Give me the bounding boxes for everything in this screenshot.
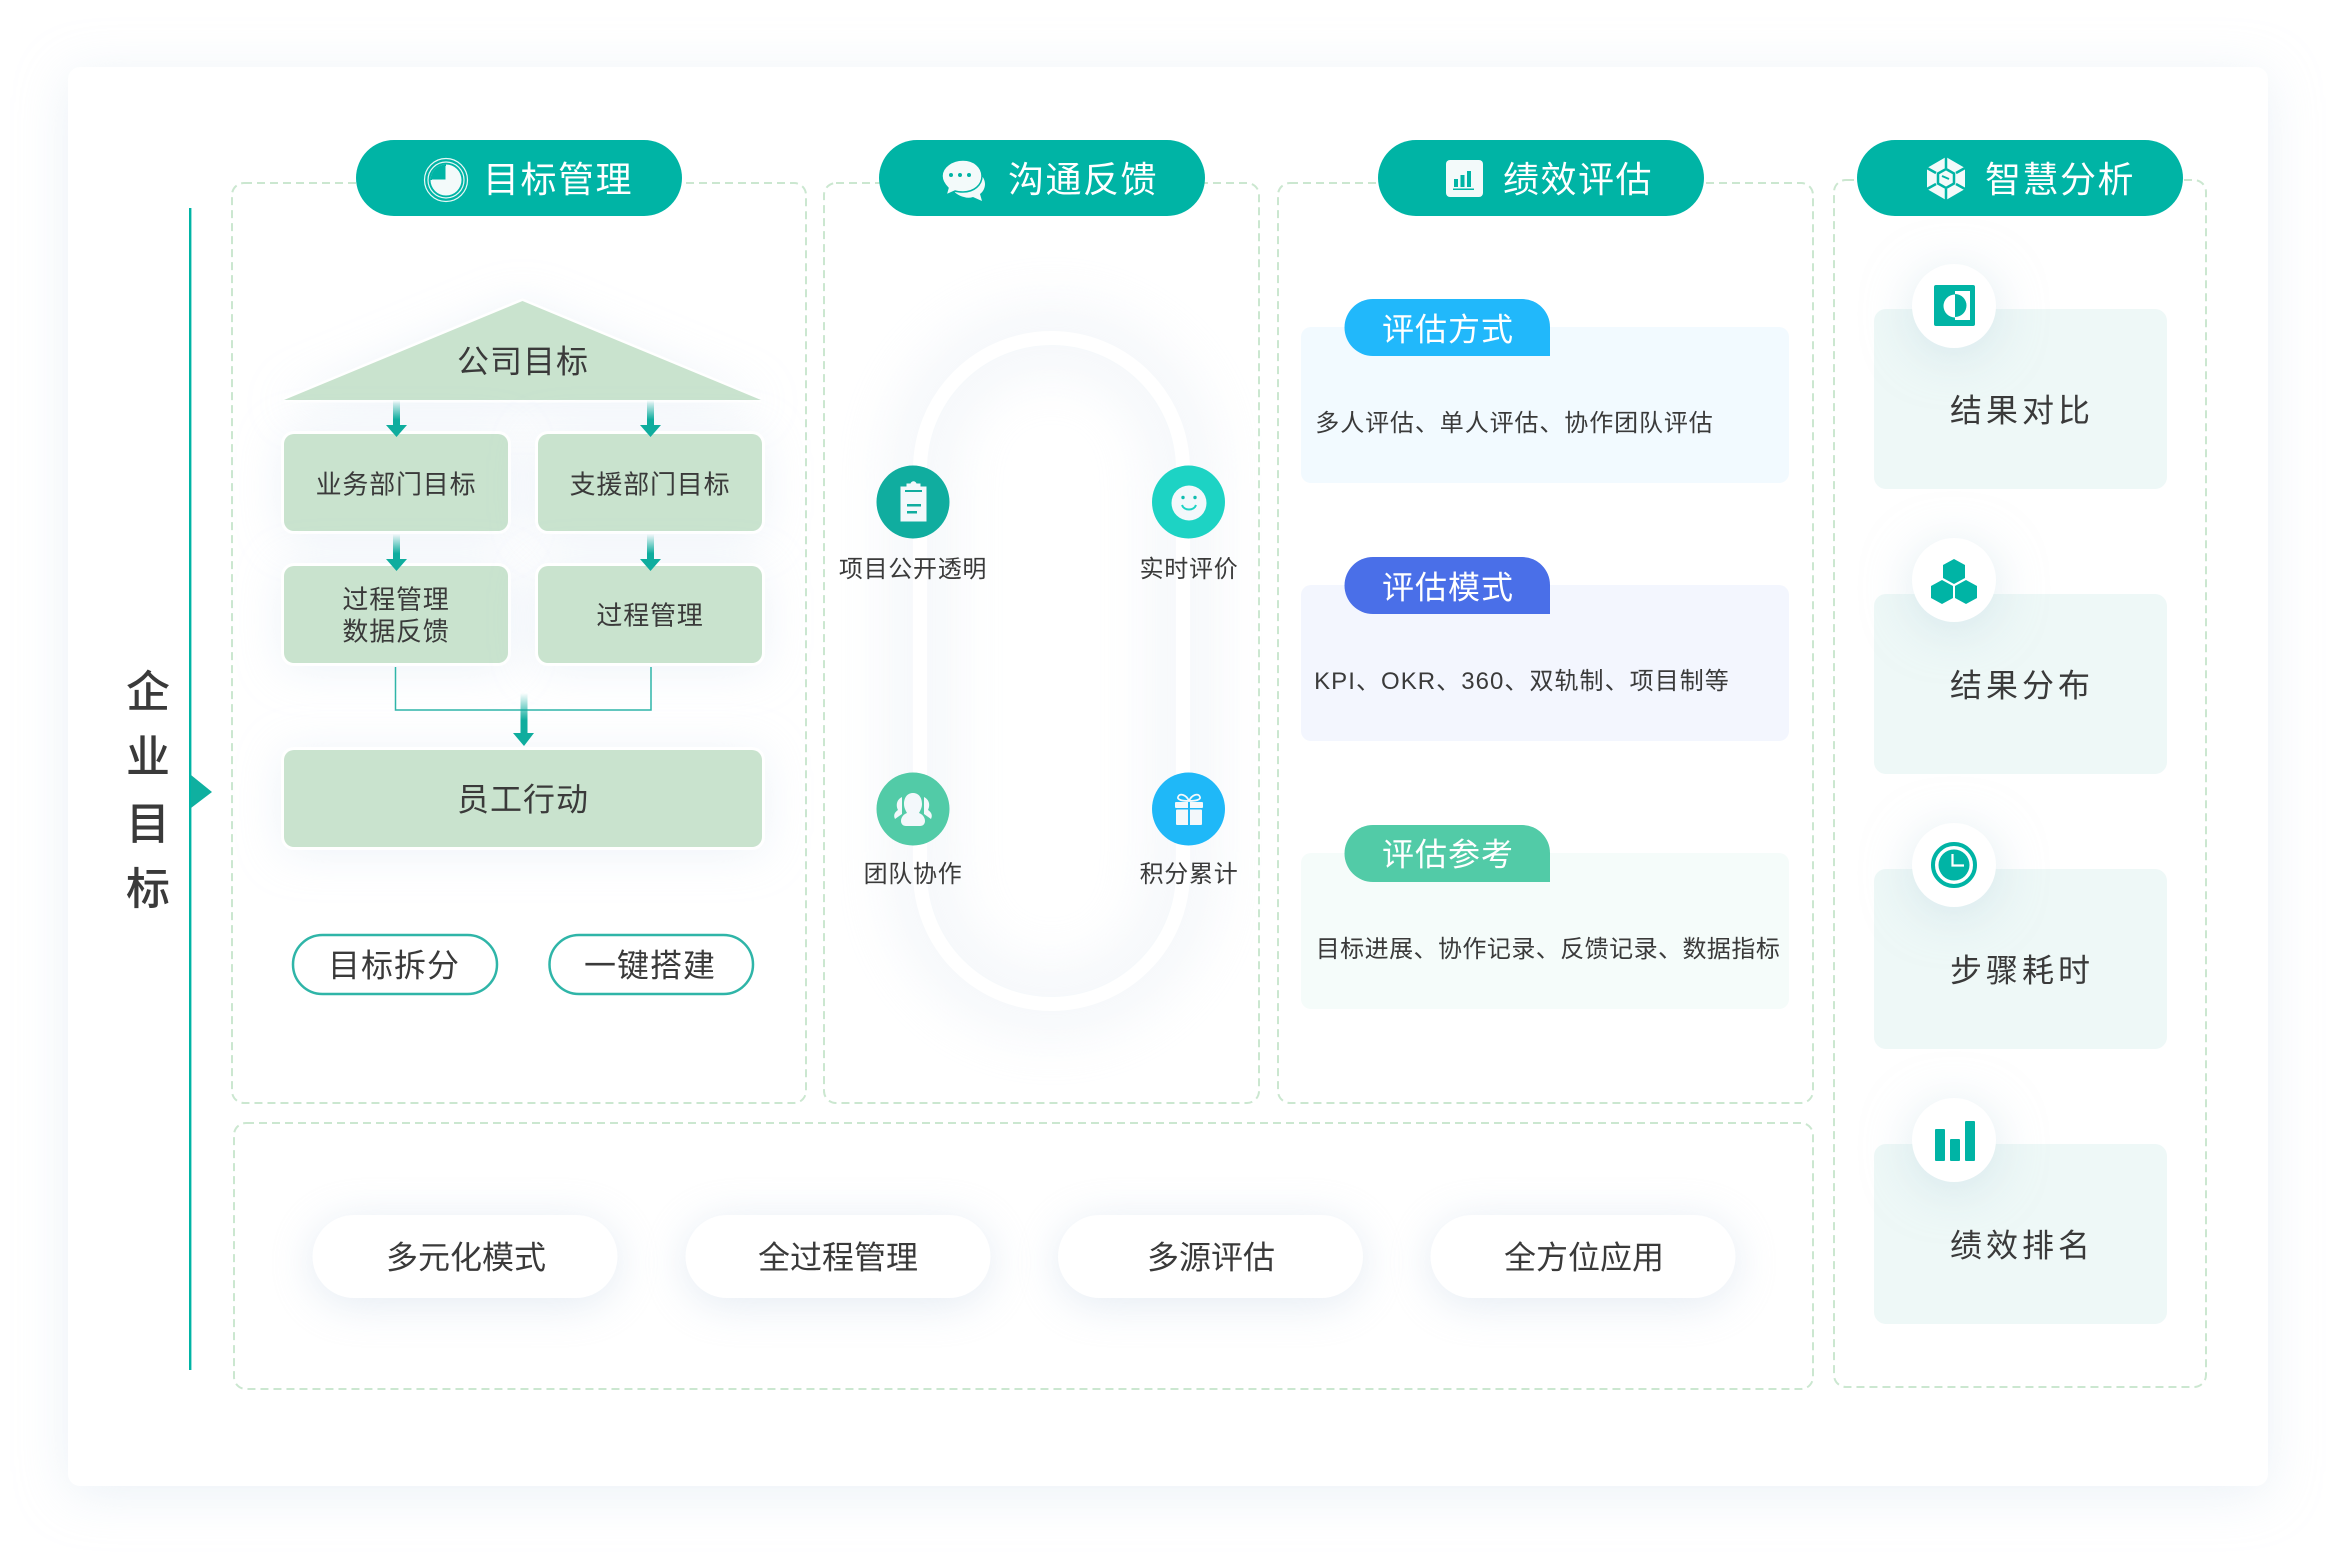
oval track — [920, 338, 1183, 1004]
left axis: enterprise goal — [126, 208, 212, 1370]
card: performance ranking: 绩效排名 — [1950, 1228, 2094, 1264]
box: support department goals — [538, 434, 762, 531]
axis line — [189, 208, 191, 1370]
icon: chat bubbles — [942, 160, 985, 201]
button: goal breakdown: 目标拆分 — [328, 948, 460, 984]
pill: whole process management — [686, 1215, 990, 1298]
card: step time: 步骤耗时 — [1950, 952, 2094, 988]
icon: hexagon — [1927, 157, 1965, 200]
card: performance ranking — [1874, 1098, 2167, 1324]
icon: target clock — [424, 158, 468, 202]
card: result distribution: 结果分布 — [1950, 668, 2094, 704]
card: evaluation modes: 评估模式 — [1382, 570, 1514, 606]
header pill — [356, 140, 682, 216]
box: process management: 过程管理 — [596, 600, 704, 630]
card: evaluation references — [1301, 825, 1789, 1009]
card: evaluation methods: 评估方式 — [1382, 312, 1514, 348]
card: evaluation modes — [1301, 557, 1789, 741]
box: employee actions — [284, 750, 762, 847]
panel outline — [824, 183, 1259, 1103]
panel: smart analysis — [1834, 140, 2206, 1387]
pill: multi-source evaluation: 多源评估 — [1147, 1240, 1275, 1276]
item: team collaboration: 团队协作 — [864, 861, 962, 888]
panel: platform features — [234, 1123, 1813, 1389]
button: goal breakdown — [293, 935, 497, 994]
pill: whole process management: 全过程管理 — [758, 1240, 918, 1276]
item: team collaboration — [864, 772, 962, 888]
axis pointer — [191, 775, 212, 808]
item: project transparency — [839, 466, 987, 583]
header pill — [1857, 140, 2183, 216]
arrow — [640, 400, 661, 437]
arrow — [386, 534, 407, 571]
box: process management — [538, 566, 762, 663]
company goal triangle — [284, 301, 761, 400]
pill: diversified modes — [312, 1215, 618, 1298]
card: evaluation methods: 多人评估、单人评估、协作团队评估 — [1315, 410, 1714, 437]
box: support department goals: 支援部门目标 — [570, 470, 730, 500]
card: evaluation references: 评估参考 — [1382, 836, 1514, 872]
card: result comparison: 结果对比 — [1950, 392, 2094, 428]
panel: communication feedback — [824, 140, 1259, 1103]
card: evaluation methods — [1301, 299, 1789, 483]
company goal triangle: 公司目标 — [457, 344, 589, 380]
card: step time — [1874, 823, 2167, 1049]
card: result distribution — [1874, 538, 2167, 774]
card: result comparison — [1874, 264, 2167, 489]
heading: 智慧分析 — [1985, 159, 2135, 200]
item: real-time evaluation: 实时评价 — [1140, 556, 1238, 583]
panel: performance evaluation — [1278, 140, 1813, 1103]
header pill — [879, 140, 1205, 216]
button: one-click build: 一键搭建 — [584, 948, 716, 984]
pill: all-round application — [1430, 1215, 1736, 1298]
item: points accumulation: 积分累计 — [1140, 861, 1238, 888]
item: points accumulation — [1140, 772, 1238, 888]
heading: 沟通反馈 — [1008, 159, 1158, 200]
button: one-click build — [550, 935, 753, 994]
pill: all-round application: 全方位应用 — [1504, 1240, 1664, 1276]
box: business department goals — [284, 434, 508, 531]
card: evaluation modes: KPI、OKR、360、双轨制、项目制等 — [1314, 668, 1730, 695]
box: employee actions: 员工行动 — [457, 782, 589, 818]
panel outline — [1834, 180, 2206, 1387]
box: process management and data feedback: 过程管理 — [342, 584, 450, 614]
panel: goal management — [232, 140, 806, 1103]
pill: diversified modes: 多元化模式 — [386, 1240, 546, 1276]
box: business department goals: 业务部门目标 — [316, 470, 476, 500]
vertical title: 企业目标 — [126, 668, 170, 914]
icon: chart card — [1446, 160, 1483, 197]
box: process management and data feedback — [284, 566, 508, 663]
card: evaluation references: 目标进展、协作记录、反馈记录、数据指标 — [1316, 936, 1780, 963]
arrow — [513, 693, 534, 746]
item: real-time evaluation — [1140, 466, 1238, 583]
pill: multi-source evaluation — [1058, 1215, 1363, 1298]
box: process management and data feedback: 数据反馈 — [342, 616, 450, 646]
panel outline — [234, 1123, 1813, 1389]
heading: 目标管理 — [483, 159, 633, 200]
panel outline — [232, 183, 806, 1103]
connector lines — [396, 667, 651, 710]
arrow — [640, 534, 661, 571]
item: project transparency: 项目公开透明 — [839, 556, 987, 583]
heading: 绩效评估 — [1503, 159, 1653, 200]
arrow — [386, 400, 407, 437]
header pill — [1378, 140, 1704, 216]
panel outline — [1278, 183, 1813, 1103]
track shadow — [920, 338, 1183, 1004]
